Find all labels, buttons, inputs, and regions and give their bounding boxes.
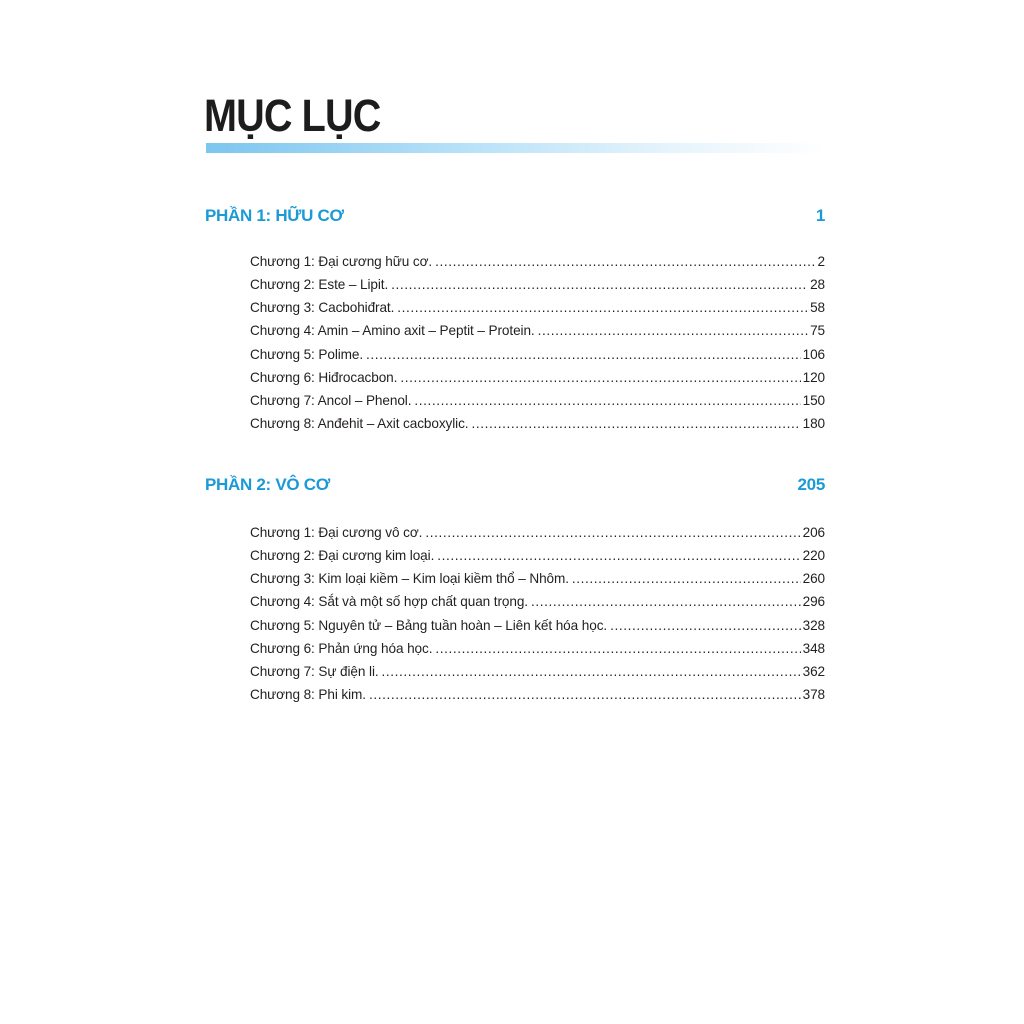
chapter list: part 1: 120 — [803, 370, 825, 385]
chapter list: part 2: Chương 4: Sắt và một số hợp chất quan trọng. — [250, 594, 528, 609]
chapter list: part 2: 206 — [803, 525, 825, 540]
chapter list: part 1: Chương 7: Ancol – Phenol. — [250, 393, 411, 408]
chapter list: part 2: Chương 6: Phản ứng hóa học. — [250, 641, 432, 656]
chapter list: part 2: Chương 8: Phi kim. — [250, 687, 366, 702]
chapter list: part 2: Chương 2: Đại cương kim loại. — [250, 548, 434, 563]
chapter list: part 2: Chương 3: Kim loại kiềm – Kim loại kiềm thổ – Nhôm. — [250, 571, 569, 586]
chapter list: part 2: Chương 7: Sự điện li. — [250, 664, 379, 679]
chapter list: part 1: Chương 6: Hiđrocacbon. — [250, 370, 397, 385]
chapter list: part 1 — [250, 254, 825, 431]
chapter list: part 1: 75 — [810, 323, 825, 338]
chapter list: part 1: 180 — [803, 416, 825, 431]
chapter list: part 1: Chương 8: Anđehit – Axit cacboxylic. — [250, 416, 468, 431]
chapter list: part 1: Chương 3: Cacbohiđrat. — [250, 300, 394, 315]
chapter list: part 2: 362 — [803, 664, 825, 679]
section heading: part 1 — [205, 206, 825, 225]
section heading: part 2 — [205, 474, 825, 494]
chapter list: part 1: Chương 2: Este – Lipit. — [250, 277, 388, 292]
chapter list: part 2: 260 — [803, 571, 825, 586]
title underline bar — [206, 143, 826, 153]
section heading: part 2: 205 — [798, 475, 825, 494]
title: MỤC LỤC — [204, 90, 380, 141]
chapter list: part 2: Chương 5: Nguyên tử – Bảng tuần hoàn – Liên kết hóa học. — [250, 618, 607, 633]
chapter list: part 2: 378 — [803, 687, 825, 702]
chapter list: part 1: Chương 5: Polime. — [250, 347, 363, 362]
chapter list: part 2: 348 — [803, 641, 825, 656]
chapter list: part 2 — [250, 525, 825, 702]
chapter list: part 2: 296 — [803, 594, 825, 609]
chapter list: part 1: Chương 4: Amin – Amino axit – Peptit – Protein. — [250, 323, 535, 338]
chapter list: part 1: Chương 1: Đại cương hữu cơ. — [250, 254, 432, 269]
chapter list: part 1: 58 — [810, 300, 825, 315]
chapter list: part 1: 28 — [810, 277, 825, 292]
section heading: part 2: PHẦN 2: VÔ CƠ — [205, 475, 330, 494]
chapter list: part 2: Chương 1: Đại cương vô cơ. — [250, 525, 422, 540]
section heading: part 1: 1 — [816, 206, 825, 225]
chapter list: part 1: 2 — [818, 254, 825, 269]
section heading: part 1: PHẦN 1: HỮU CƠ — [205, 206, 344, 225]
chapter list: part 2: 220 — [803, 548, 825, 563]
chapter list: part 2: 328 — [803, 618, 825, 633]
chapter list: part 1: 106 — [803, 347, 825, 362]
chapter list: part 1: 150 — [803, 393, 825, 408]
